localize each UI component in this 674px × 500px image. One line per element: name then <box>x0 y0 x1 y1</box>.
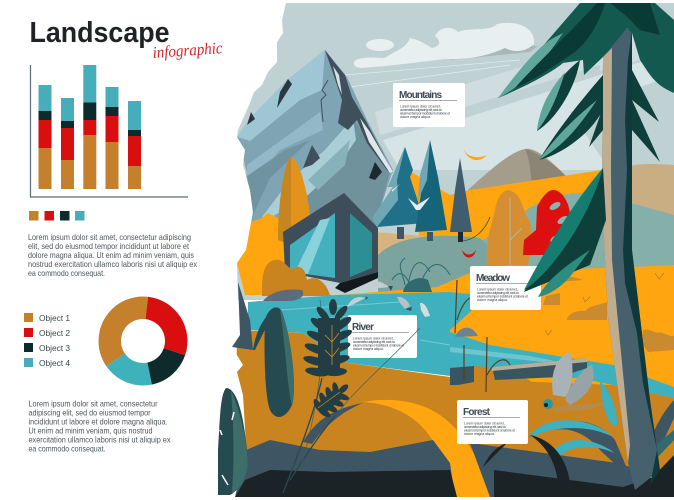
orange tree and bush left of cabin <box>237 157 310 295</box>
label: mountains: dolore magna aliqua. <box>400 115 431 119</box>
tall leaf <box>265 307 294 417</box>
text block: lower paragraph: Ut enim ad minim veniam, quis nostrud <box>28 426 153 436</box>
label: mountains: consectetur adipiscing elit, sed do <box>400 108 442 112</box>
donut chart <box>99 297 187 385</box>
text block: upper paragraph: ea commodo consequat. <box>28 269 105 278</box>
label: mountains: eiusmod tempor incididunt ut labore et <box>400 112 450 116</box>
donut legend: Object 4 <box>39 358 70 368</box>
fish <box>347 282 430 317</box>
donut legend: Object 2 <box>39 328 70 338</box>
donut legend: Object 3 <box>39 343 70 353</box>
meadow <box>340 265 674 400</box>
slate and dark foreground <box>235 440 674 497</box>
mountain <box>237 50 393 240</box>
cabin <box>283 193 378 293</box>
chart legend swatches <box>29 211 84 220</box>
cattails <box>455 280 510 392</box>
stone <box>263 289 303 301</box>
river <box>248 292 674 398</box>
text block: upper paragraph: elit, sed do eiusmod tempor incididunt ut labore et <box>28 242 190 251</box>
text block: lower paragraph: exercitation ullamco laboris nisi ut aliquip ex <box>28 436 170 444</box>
log <box>450 358 587 385</box>
grey plant at edge <box>232 282 275 350</box>
arc shadow <box>303 403 363 444</box>
title: infographic <box>152 38 224 62</box>
reeds by cabin <box>392 258 450 292</box>
text block: lower paragraph: incididunt ut labore et dolore magna aliqua. <box>28 418 168 426</box>
label: river: eiusmod tempor incididunt ut labore et <box>353 344 404 348</box>
stacked bar chart <box>30 65 188 197</box>
rock at river <box>455 328 478 337</box>
text block: upper paragraph: Lorem ipsum dolor sit amet, consectetur adipiscing <box>28 233 191 242</box>
bird <box>463 148 487 160</box>
landscape illustration <box>230 0 674 497</box>
label: forest: Lorem ipsum dolor sit amet, <box>464 422 505 426</box>
label: forest: dolore magna aliqua. <box>464 432 495 436</box>
label: meadow: dolore magna aliqua. <box>477 298 508 302</box>
text block: upper paragraph: nostrud exercitation ullamco laboris nisi ut aliquip ex <box>28 260 197 269</box>
orange path arc <box>363 400 494 497</box>
text block: upper paragraph: dolore magna aliqua. Ut enim ad minim veniam, quis <box>28 251 194 260</box>
clouds <box>354 23 538 68</box>
bottom-right plants <box>530 382 674 497</box>
label: forest: eiusmod tempor incididunt ut labore et <box>464 428 515 432</box>
label: forest: consectetur adipiscing elit, sed do <box>464 425 506 429</box>
bottom-left leaf <box>218 388 248 495</box>
donut legend <box>24 313 70 368</box>
label: mountains: Mountains <box>399 90 442 101</box>
sky <box>230 0 674 300</box>
label: meadow: Meadow <box>476 273 510 284</box>
label: river: consectetur adipiscing elit, sed do <box>353 340 395 344</box>
pine trees <box>372 140 490 242</box>
label: meadow: eiusmod tempor incididunt ut labore et <box>477 294 528 298</box>
red tree <box>523 190 570 255</box>
large pine trunk <box>602 28 660 490</box>
label: forest: Forest <box>463 407 491 418</box>
red crescent <box>462 250 476 258</box>
text block: lower paragraph: Lorem ipsum dolor sit amet, consectetur <box>28 400 158 408</box>
label: meadow <box>470 266 541 310</box>
text block: upper paragraph <box>28 233 197 278</box>
dragonfly <box>543 352 607 412</box>
title <box>30 17 224 62</box>
title: Landscape <box>30 17 170 49</box>
label: river: dolore magna aliqua. <box>353 347 384 351</box>
hills behind the trees <box>375 149 674 295</box>
text block: lower paragraph <box>28 400 170 454</box>
label: river: Lorem ipsum dolor sit amet, <box>353 336 394 340</box>
label: river: River <box>352 322 374 333</box>
label: mountains <box>393 83 465 127</box>
donut legend: Object 1 <box>39 313 70 323</box>
text block: lower paragraph: ea commodo consequat. <box>28 444 106 454</box>
autumn tree <box>487 190 532 265</box>
text block: lower paragraph: adipiscing elit, sed do eiusmod tempor <box>28 408 151 418</box>
bushes <box>262 260 335 296</box>
label: forest <box>457 400 528 444</box>
label: river <box>348 315 417 358</box>
label: mountains: Lorem ipsum dolor sit amet, <box>400 104 441 108</box>
wheat <box>283 299 420 493</box>
label: meadow: consectetur adipiscing elit, sed do <box>477 291 519 295</box>
pine fronds <box>498 3 674 297</box>
brown foreground ground <box>235 330 674 470</box>
label: meadow: Lorem ipsum dolor sit amet, <box>477 288 518 292</box>
